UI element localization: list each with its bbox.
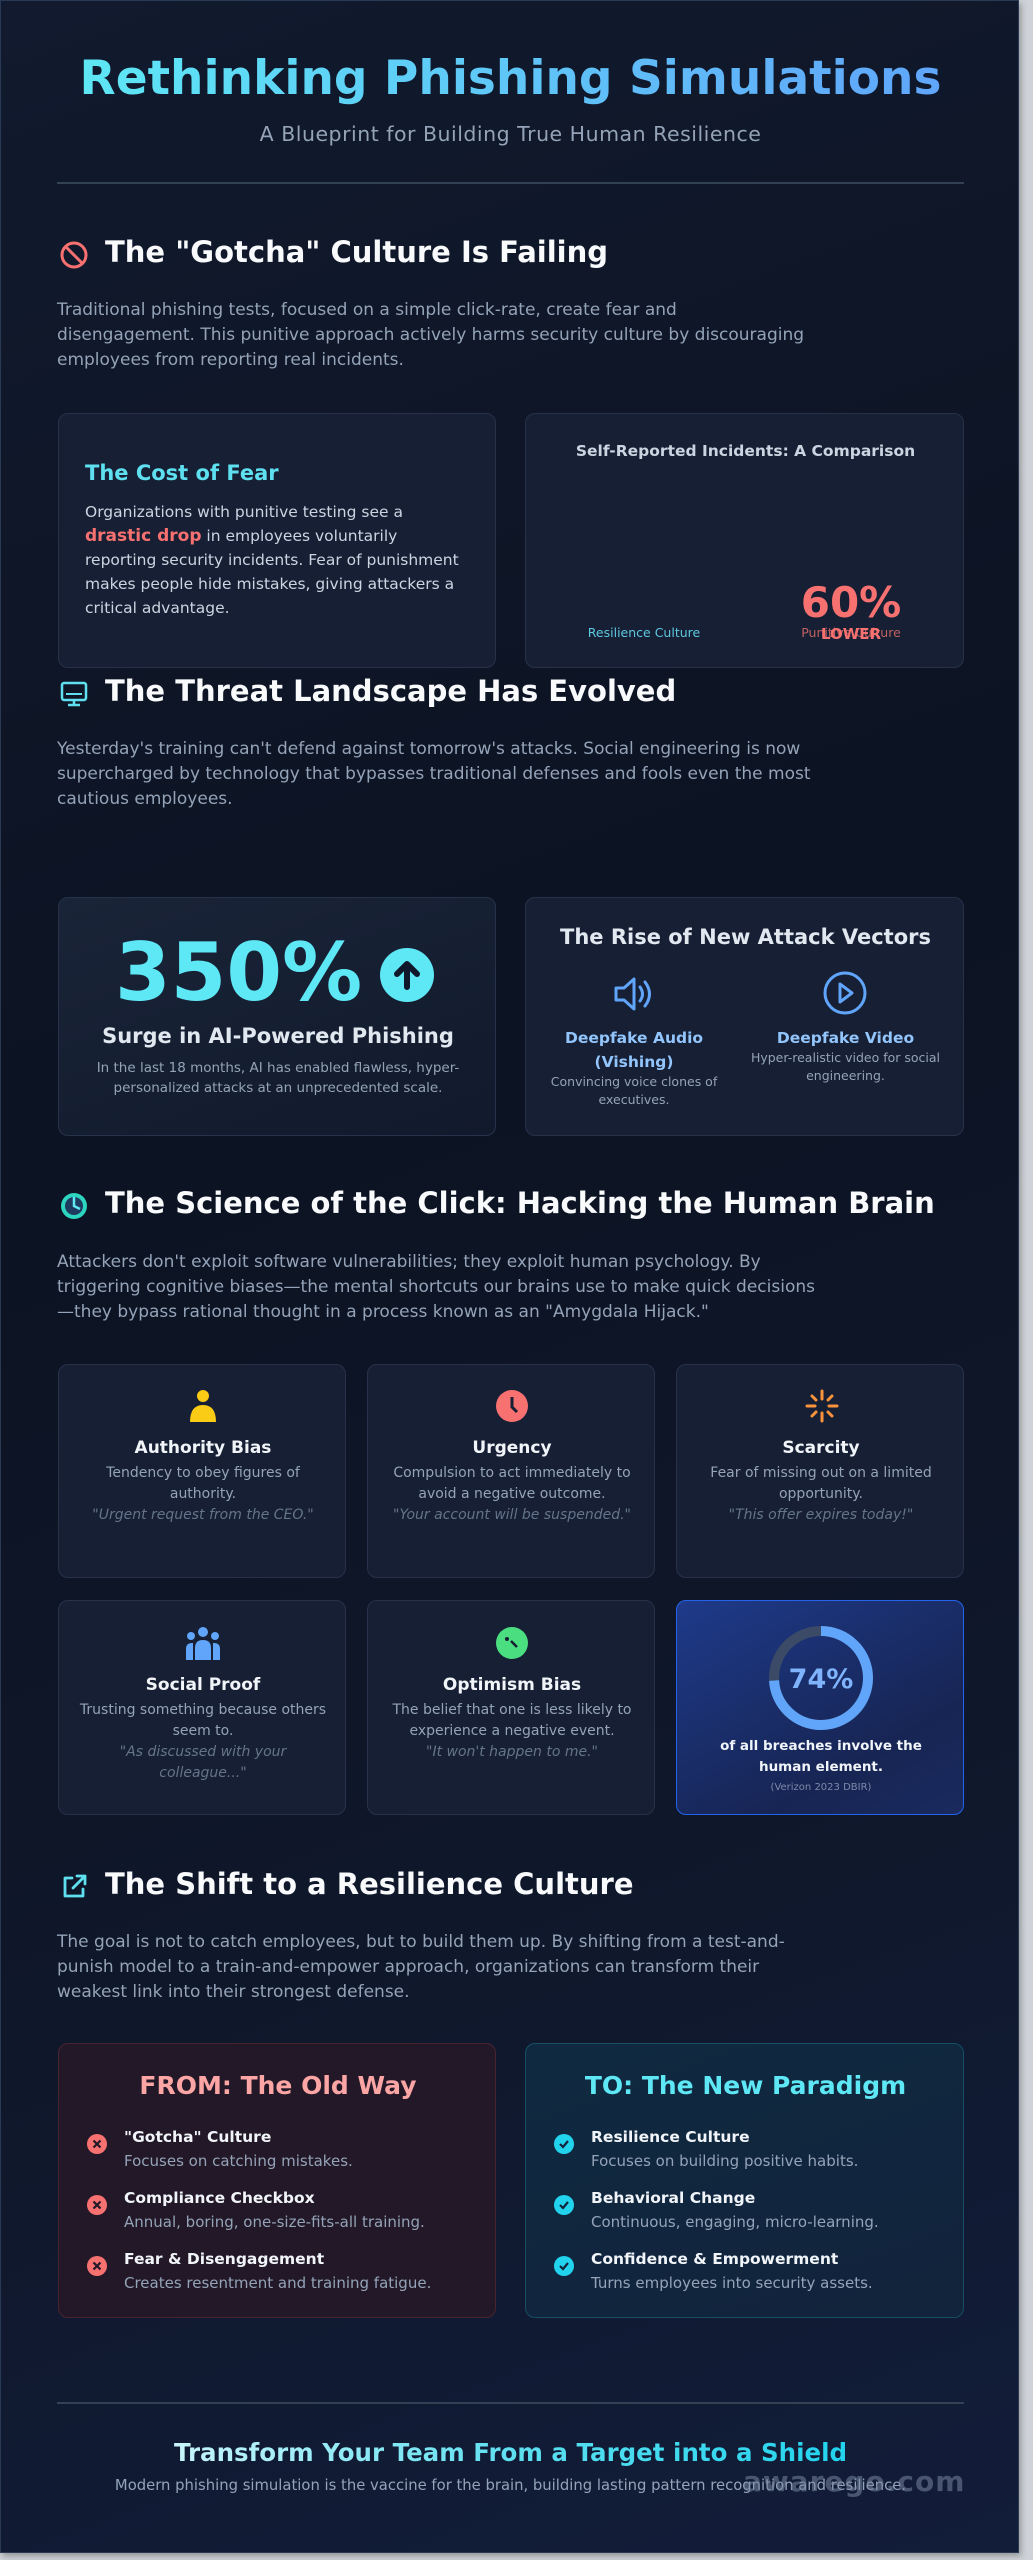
- section 3 heading: The Science of the Click: Hacking the Human Brain: [105, 1186, 935, 1220]
- panel: from old way: FROM: The Old Way: [139, 2071, 417, 2100]
- section 4 text: The goal is not to catch employees, but to build them up. By shifting from a test-and-punish model to a train-and-empower approach, organizations can transform their weakest link into their strongest defense.: [57, 1932, 785, 2002]
- card: scarcity: Fear of missing out on a limited opportunity.: [710, 1465, 932, 1502]
- card: scarcity: "This offer expires today!": [729, 1507, 913, 1523]
- card: authority bias: [58, 1364, 346, 1578]
- icon: speaker: [614, 977, 651, 1010]
- icon: arrow up circle: [380, 948, 434, 1002]
- footer text: Modern phishing simulation is the vaccine for the brain, building lasting pattern recognition and resilience.: [115, 2477, 906, 2494]
- card: 74% stat: of all breaches involve the human element.: [720, 1738, 922, 1775]
- panel: to new paradigm: Behavioral Change: [591, 2189, 755, 2207]
- card: 74% stat: [676, 1600, 964, 1815]
- panel: to new paradigm: Turns employees into security assets.: [591, 2274, 873, 2292]
- panel: 350% stat: Surge in AI-Powered Phishing: [102, 1024, 454, 1048]
- chart: self-reported incidents: Resilience Culture: [588, 625, 700, 640]
- panel: new attack vectors: Deepfake Video: [777, 1029, 914, 1047]
- panel: from old way: Fear & Disengagement: [124, 2250, 324, 2268]
- subtitle: A Blueprint for Building True Human Resilience: [260, 122, 761, 146]
- card: urgency: Compulsion to act immediately to avoid a negative outcome.: [393, 1465, 631, 1502]
- chart: self-reported incidents: 60%: [801, 578, 901, 627]
- card: authority bias: Authority Bias: [135, 1438, 271, 1458]
- card: authority bias: "Urgent request from the CEO.": [92, 1507, 314, 1523]
- chart: donut 74%: [769, 1626, 873, 1730]
- card: optimism bias: [367, 1600, 655, 1815]
- panel: from old way: Creates resentment and training fatigue.: [124, 2274, 431, 2292]
- icon: clock: [496, 1390, 528, 1422]
- card: optimism bias: "It won't happen to me.": [426, 1744, 598, 1760]
- panel: from old way: Compliance Checkbox: [124, 2189, 315, 2207]
- icon: external link: [64, 1874, 86, 1898]
- panel: from old way: Focuses on catching mistakes.: [124, 2152, 353, 2170]
- title: Rethinking Phishing Simulations: [80, 51, 941, 106]
- chart: donut 74%: 74%: [789, 1664, 853, 1695]
- icon: play: [824, 972, 866, 1014]
- section 2 heading: The Threat Landscape Has Evolved: [105, 674, 676, 708]
- section 2 text: Yesterday's training can't defend against tomorrow's attacks. Social engineering is now supercharged by technology that bypasses traditional defenses and fools even the most cautious employees.: [57, 739, 810, 809]
- panel: cost of fear: [58, 413, 496, 668]
- icon: person: [190, 1390, 216, 1422]
- panel: from old way: "Gotcha" Culture: [124, 2128, 271, 2146]
- panel: new attack vectors: Deepfake Audio (Vishing): [565, 1029, 703, 1071]
- panel: from old way: [58, 2043, 496, 2318]
- card: 74% stat: (Verizon 2023 DBIR): [771, 1782, 871, 1793]
- icon: brain: [61, 1193, 87, 1219]
- panel: from old way: Annual, boring, one-size-fits-all training.: [124, 2213, 425, 2231]
- chart: self-reported incidents: Self-Reported Incidents: A Comparison: [576, 442, 915, 460]
- panel: to new paradigm: [525, 2043, 964, 2318]
- panel: 350% stat: In the last 18 months, AI has enabled flawless, hyper-personalized attacks at an unprecedented scale.: [97, 1060, 459, 1096]
- card: urgency: Urgency: [472, 1438, 552, 1458]
- card: scarcity: [676, 1364, 964, 1578]
- card: social proof: "As discussed with your colleague...": [120, 1744, 286, 1781]
- icon: ban: [60, 242, 88, 268]
- card: scarcity: Scarcity: [782, 1438, 860, 1458]
- panel: cost of fear: Organizations with punitive testing see a drastic drop in employees voluntarily reporting security incidents. Fear of punishment makes people hide mistakes, giving attackers a critical advantage.: [85, 503, 459, 617]
- footer title: Transform Your Team From a Target into a Shield: [174, 2438, 847, 2467]
- panel: to new paradigm: Resilience Culture: [591, 2128, 750, 2146]
- panel: to new paradigm: Continuous, engaging, micro-learning.: [591, 2213, 879, 2231]
- icon: monitor: [60, 682, 88, 706]
- panel: to new paradigm: Focuses on building positive habits.: [591, 2152, 858, 2170]
- panel: to new paradigm: Confidence & Empowerment: [591, 2250, 838, 2268]
- section 1 text: Traditional phishing tests, focused on a simple click-rate, create fear and disengagement. This punitive approach actively harms security culture by discouraging employees from reporting real incidents.: [57, 300, 804, 370]
- panel: 350% stat: 350%: [115, 926, 362, 1019]
- panel: cost of fear: The Cost of Fear: [85, 461, 279, 485]
- card: social proof: Social Proof: [146, 1675, 260, 1695]
- icon: group: [186, 1627, 220, 1660]
- section 3 text: Attackers don't exploit software vulnerabilities; they exploit human psychology. By triggering cognitive biases—the mental shortcuts our brains use to make quick decisions—they bypass rational thought in a process known as an "Amygdala Hijack.": [57, 1252, 815, 1322]
- chart: self-reported incidents: Punitive Culture: [801, 625, 901, 640]
- card: social proof: Trusting something because others seem to.: [80, 1702, 326, 1739]
- panel: new attack vectors: The Rise of New Attack Vectors: [560, 925, 931, 949]
- card: social proof: [58, 1600, 346, 1815]
- card: authority bias: Tendency to obey figures of authority.: [106, 1465, 300, 1502]
- card: optimism bias: The belief that one is less likely to experience a negative event.: [392, 1702, 632, 1739]
- card: optimism bias: Optimism Bias: [443, 1675, 581, 1695]
- panel: new attack vectors: Hyper-realistic video for social engineering.: [751, 1050, 940, 1083]
- panel: new attack vectors: [525, 897, 964, 1136]
- chart: self-reported incidents: LOWER: [821, 625, 881, 643]
- icon: spinner: [806, 1390, 838, 1422]
- panel: to new paradigm: TO: The New Paradigm: [585, 2071, 906, 2100]
- chart: self-reported incidents: [525, 413, 964, 668]
- card: urgency: [367, 1364, 655, 1578]
- watermark: awarego.com: [743, 2465, 965, 2498]
- panel: 350% stat: [58, 897, 496, 1136]
- card: urgency: "Your account will be suspended.": [393, 1507, 631, 1523]
- panel: new attack vectors: Convincing voice clones of executives.: [551, 1074, 717, 1107]
- icon: face: [496, 1627, 528, 1659]
- section 4 heading: The Shift to a Resilience Culture: [105, 1867, 634, 1901]
- section 1 heading: The "Gotcha" Culture Is Failing: [105, 235, 608, 269]
